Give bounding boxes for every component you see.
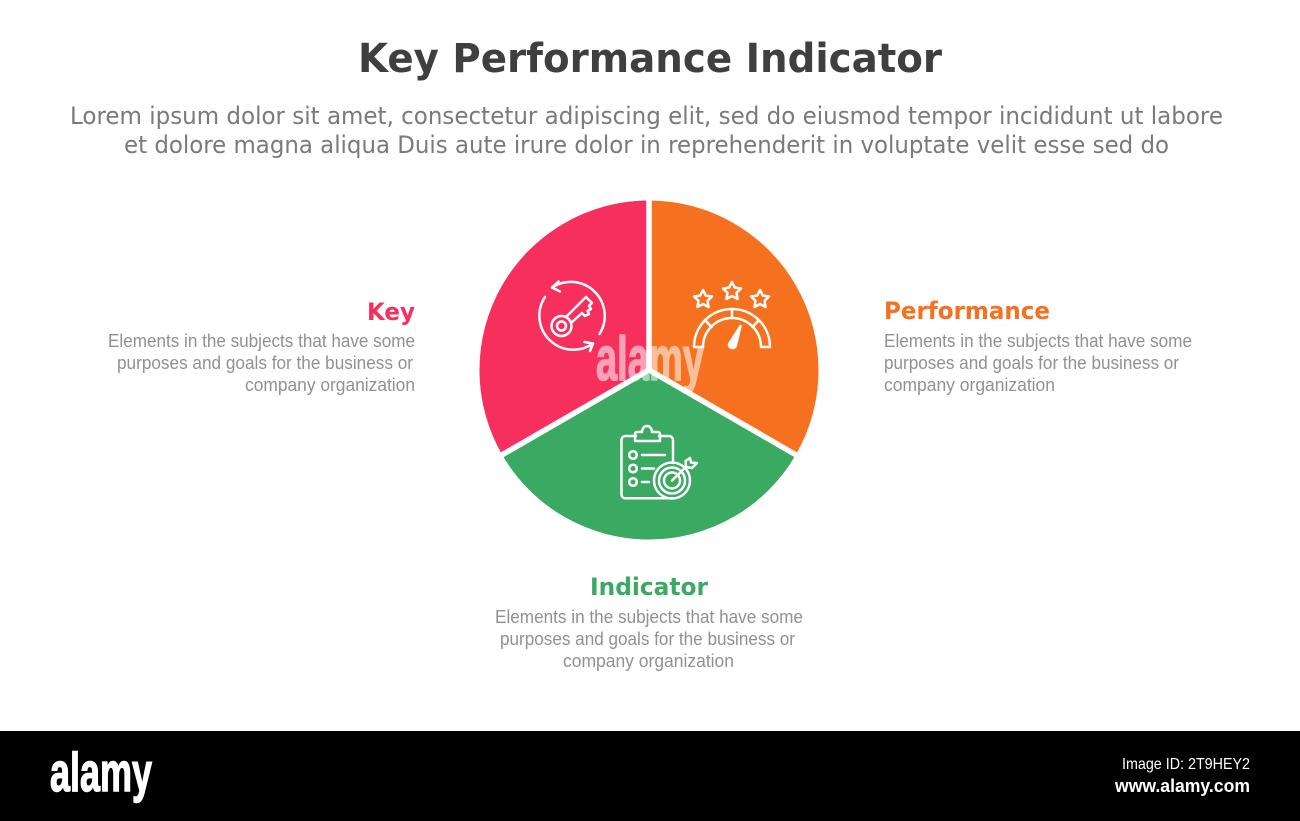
intro paragraph: Lorem ipsum dolor sit amet, consectetur adipiscing elit, sed do eiusmod tempor incididunt ut labore [70, 102, 1223, 130]
description: indicator: purposes and goals for the business or [500, 629, 795, 649]
footer logo: alamy [50, 741, 152, 803]
image id: Image ID: 2T9HEY2 [1122, 756, 1250, 773]
description: performance: company organization [884, 375, 1055, 395]
intro paragraph: et dolore magna aliqua Duis aute irure dolor in reprehenderit in voluptate velit esse sed do [124, 131, 1169, 159]
title: Key Performance Indicator [358, 36, 942, 82]
description: key: company organization [245, 375, 415, 395]
segment: performance [649, 200, 819, 455]
heading: indicator: Indicator [590, 573, 708, 601]
description: indicator [495, 607, 803, 671]
icon: checklist clipboard with target [621, 426, 697, 498]
heading: performance: Performance [884, 297, 1050, 325]
description: key: Elements in the subjects that have some [108, 331, 415, 351]
description: key [108, 331, 415, 395]
description: performance: Elements in the subjects that have some [884, 331, 1192, 351]
pie chart [479, 195, 819, 540]
description: indicator: Elements in the subjects that have some [495, 607, 803, 627]
description: key: purposes and goals for the business or [117, 353, 413, 373]
description: indicator: company organization [563, 651, 734, 671]
segment dividers [498, 195, 800, 457]
label: indicator [495, 573, 803, 671]
label: key [108, 298, 415, 395]
description: performance: purposes and goals for the business or [884, 353, 1179, 373]
intro paragraph [70, 102, 1223, 159]
footer bar [0, 731, 1300, 821]
segment: indicator [502, 370, 796, 540]
icon: gauge with three stars [694, 282, 770, 348]
website: www.alamy.com [1114, 776, 1250, 796]
heading: key: Key [367, 298, 415, 326]
label: performance [884, 297, 1192, 395]
icon: key with rotating arrows [539, 282, 605, 351]
segment: key [479, 200, 649, 455]
watermark: alamy [596, 325, 704, 394]
description: performance [884, 331, 1192, 395]
